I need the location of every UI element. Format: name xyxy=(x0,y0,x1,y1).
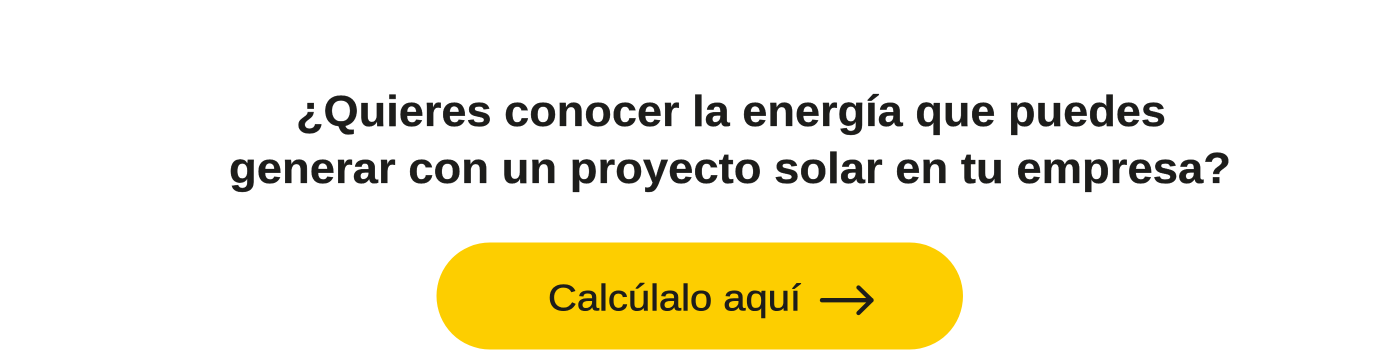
button: calculate xyxy=(436,242,963,350)
icon: arrow xyxy=(822,288,872,313)
heading xyxy=(229,87,1231,193)
button label: Calcúlalo aquí xyxy=(548,276,802,318)
heading: generar con un proyecto solar en tu empresa? xyxy=(229,144,1231,193)
heading: ¿Quieres conocer la energía que puedes xyxy=(296,87,1166,136)
